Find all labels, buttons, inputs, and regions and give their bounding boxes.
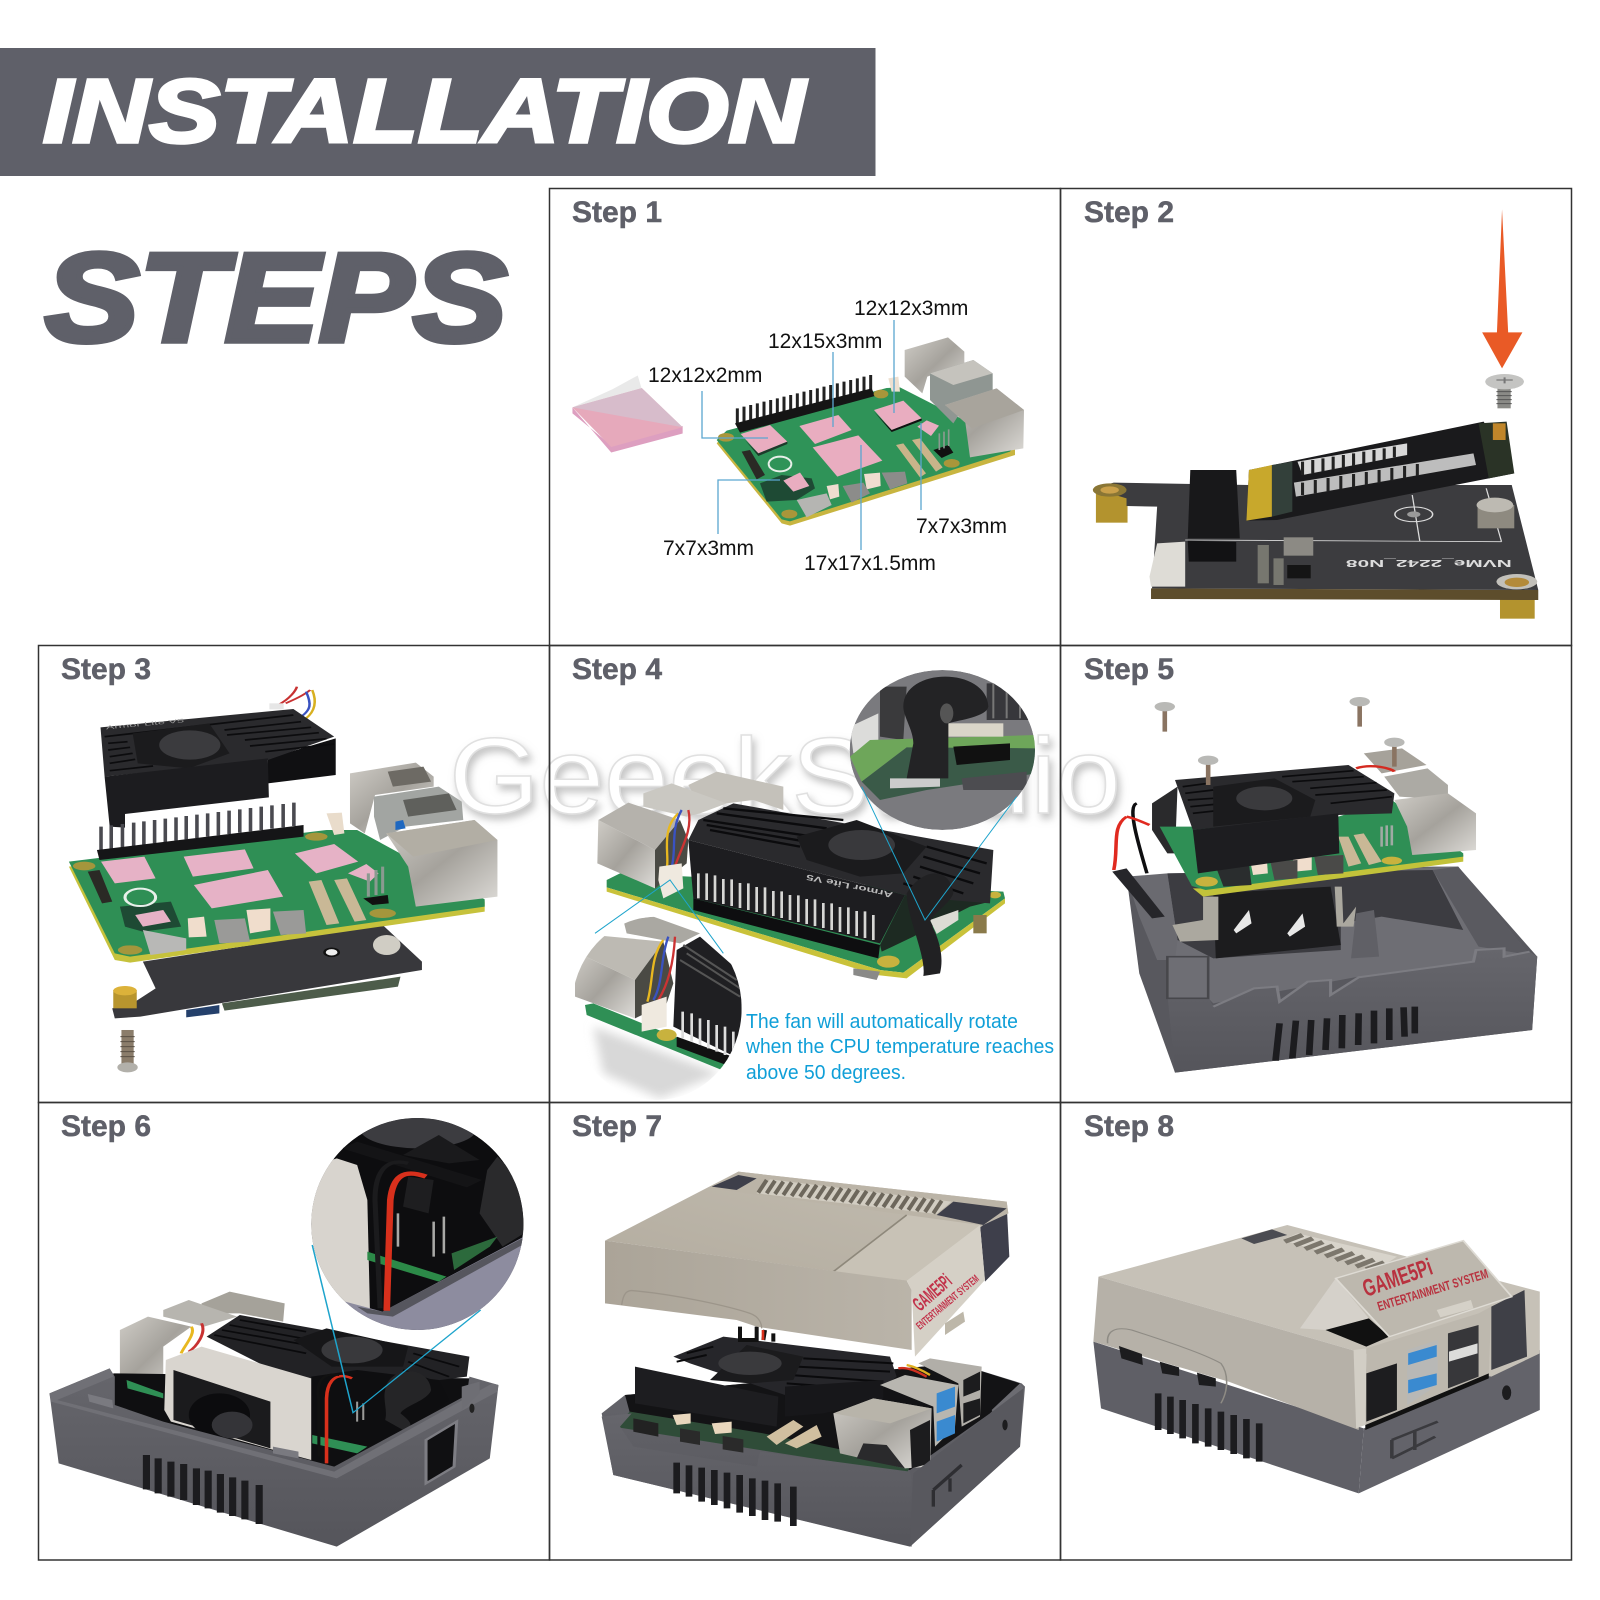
label: lid branding [909, 1270, 982, 1332]
callout lines: zoom indicators [595, 787, 1017, 953]
inset: ribbon cable close-up [850, 670, 1037, 830]
image: NVMe board below [112, 925, 422, 1018]
inset: fan connector close-up [572, 917, 742, 1100]
label: left 7x7x3mm: 7x7x3mm [663, 537, 754, 560]
label: lid branding: GAME5Pi [1359, 1254, 1436, 1303]
image: Raspberry Pi with ports and pads [69, 763, 497, 963]
image: case base with board [602, 1327, 1025, 1547]
heading: step 2: Step 2 [1084, 196, 1174, 229]
note: fan rotation: when the CPU temperature reaches [745, 1036, 1054, 1058]
heading: step 7: Step 7 [572, 1110, 662, 1143]
panel: step 3 [38, 646, 550, 1102]
heading: step 4: Step 4 [572, 653, 662, 686]
image: NVMe adapter board with SSD: NVMe_2242_N08 [1346, 558, 1512, 569]
callout lines: pad locations [702, 320, 921, 550]
callout lines: zoom indicator [312, 1245, 481, 1413]
panel: step 1 [550, 188, 1060, 646]
panel: step 2 [1060, 188, 1572, 646]
label: 12x12x2mm: 12x12x2mm [648, 364, 762, 387]
arrow: down [1482, 209, 1522, 368]
panel: step 4 [550, 646, 1060, 1102]
label: lid branding [1359, 1254, 1490, 1314]
watermark: GeeekStudio: GeeekStudio [449, 715, 1121, 836]
image: heatsink with fan: Armor Lite V5 [105, 718, 186, 731]
panel: step 7 [550, 1102, 1060, 1560]
icon: thermal pad sheet [572, 375, 683, 452]
note: fan rotation [745, 1011, 1054, 1084]
title banner: INSTALLATION: INSTALLATION [43, 62, 807, 162]
image: case base with fan and board [1112, 748, 1537, 1073]
panel: step 8 [1060, 1102, 1572, 1560]
image: NES style lid [605, 1172, 1009, 1357]
title banner: INSTALLATION [0, 48, 876, 176]
note: fan rotation: above 50 degrees. [746, 1062, 906, 1084]
icon: screw [1485, 374, 1524, 408]
label: 12x12x3mm: 12x12x3mm [854, 297, 968, 320]
heading: step 5: Step 5 [1084, 653, 1174, 686]
image: assembled board with heatsink [597, 772, 1005, 980]
label: lid branding: ENTERTAINMENT SYSTEM [1375, 1266, 1490, 1314]
image: NVMe adapter board with SSD [1093, 422, 1538, 619]
heading: STEPS: STEPS [45, 227, 507, 368]
image: assembled NES style case [1093, 1225, 1540, 1493]
note: fan rotation: The fan will automatically rotate [746, 1011, 1018, 1033]
image: case with assembled board and fan [49, 1292, 498, 1547]
icons: four case screws [1155, 697, 1405, 785]
icon: screw [117, 1030, 138, 1072]
panel: step 6 [38, 1102, 550, 1560]
label: 12x15x3mm: 12x15x3mm [768, 330, 882, 353]
panel: step 5 [1060, 646, 1572, 1102]
image: assembled board with heatsink: Armor Lite V5 [805, 872, 894, 900]
label: lid branding: ENTERTAINMENT SYSTEM [914, 1273, 982, 1332]
heading: step 8: Step 8 [1084, 1110, 1174, 1143]
label: 17x17x1.5mm: 17x17x1.5mm [804, 552, 936, 575]
heading: step 6: Step 6 [61, 1110, 151, 1143]
heading: step 1: Step 1 [572, 196, 662, 229]
inset: fan wire close-up [306, 1108, 524, 1333]
label: right 7x7x3mm: 7x7x3mm [916, 515, 1007, 538]
heading: step 3: Step 3 [61, 653, 151, 686]
image: Raspberry Pi board with thermal pads [717, 337, 1024, 526]
label: lid branding: GAME5Pi [909, 1270, 956, 1316]
image: heatsink with fan [101, 687, 336, 828]
